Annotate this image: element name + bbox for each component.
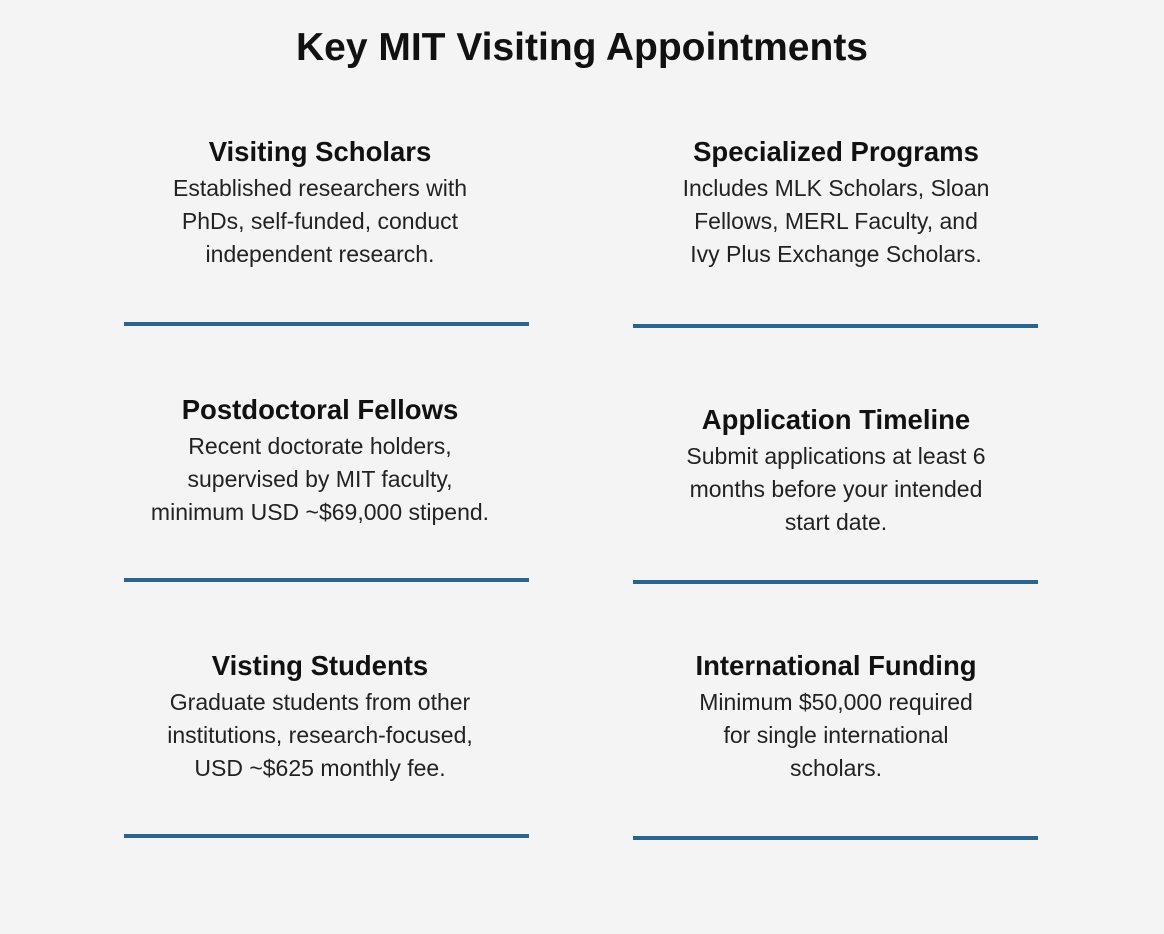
panel: application timeline: months before your intended	[690, 476, 982, 502]
panel: international funding: Minimum $50,000 required	[699, 689, 973, 715]
panel: international funding: International Funding	[695, 650, 977, 681]
panel: application timeline: Application Timeline	[702, 404, 970, 435]
panel: visiting scholars: Established researchers with	[173, 175, 467, 201]
panel: international funding	[695, 650, 977, 781]
panel: postdoctoral fellows: Postdoctoral Fellows	[182, 394, 458, 425]
panel: application timeline: Submit applications at least 6	[686, 443, 986, 469]
panel: international funding: for single international	[723, 722, 949, 748]
panel: visiting students	[167, 650, 473, 781]
panel: specialized programs: Ivy Plus Exchange Scholars.	[690, 241, 982, 267]
panel: visiting scholars: independent research.	[206, 241, 434, 267]
panel: specialized programs: Fellows, MERL Faculty, and	[694, 208, 978, 234]
panel: postdoctoral fellows: supervised by MIT faculty,	[187, 466, 453, 492]
panel: visiting students: Visting Students	[212, 650, 428, 681]
panel: postdoctoral fellows: minimum USD ~$69,000 stipend.	[151, 499, 489, 525]
panel: visiting scholars: PhDs, self-funded, conduct	[182, 208, 458, 234]
panel: application timeline	[686, 404, 986, 535]
panel: specialized programs	[683, 136, 989, 267]
panel: visiting students: USD ~$625 monthly fee.	[194, 755, 446, 781]
panel: postdoctoral fellows	[151, 394, 489, 525]
panel: specialized programs: Includes MLK Scholars, Sloan	[683, 175, 989, 201]
panel: international funding: scholars.	[790, 755, 882, 781]
panel: visiting scholars	[173, 136, 467, 267]
panel: visiting scholars: Visiting Scholars	[209, 136, 431, 167]
panel: application timeline: start date.	[785, 509, 887, 535]
title: Key MIT Visiting Appointments	[296, 26, 868, 69]
panel: postdoctoral fellows: Recent doctorate holders,	[188, 433, 452, 459]
panel: visiting students: institutions, research-focused,	[167, 722, 473, 748]
panel: specialized programs: Specialized Programs	[693, 136, 979, 167]
panel: visiting students: Graduate students from other	[170, 689, 470, 715]
